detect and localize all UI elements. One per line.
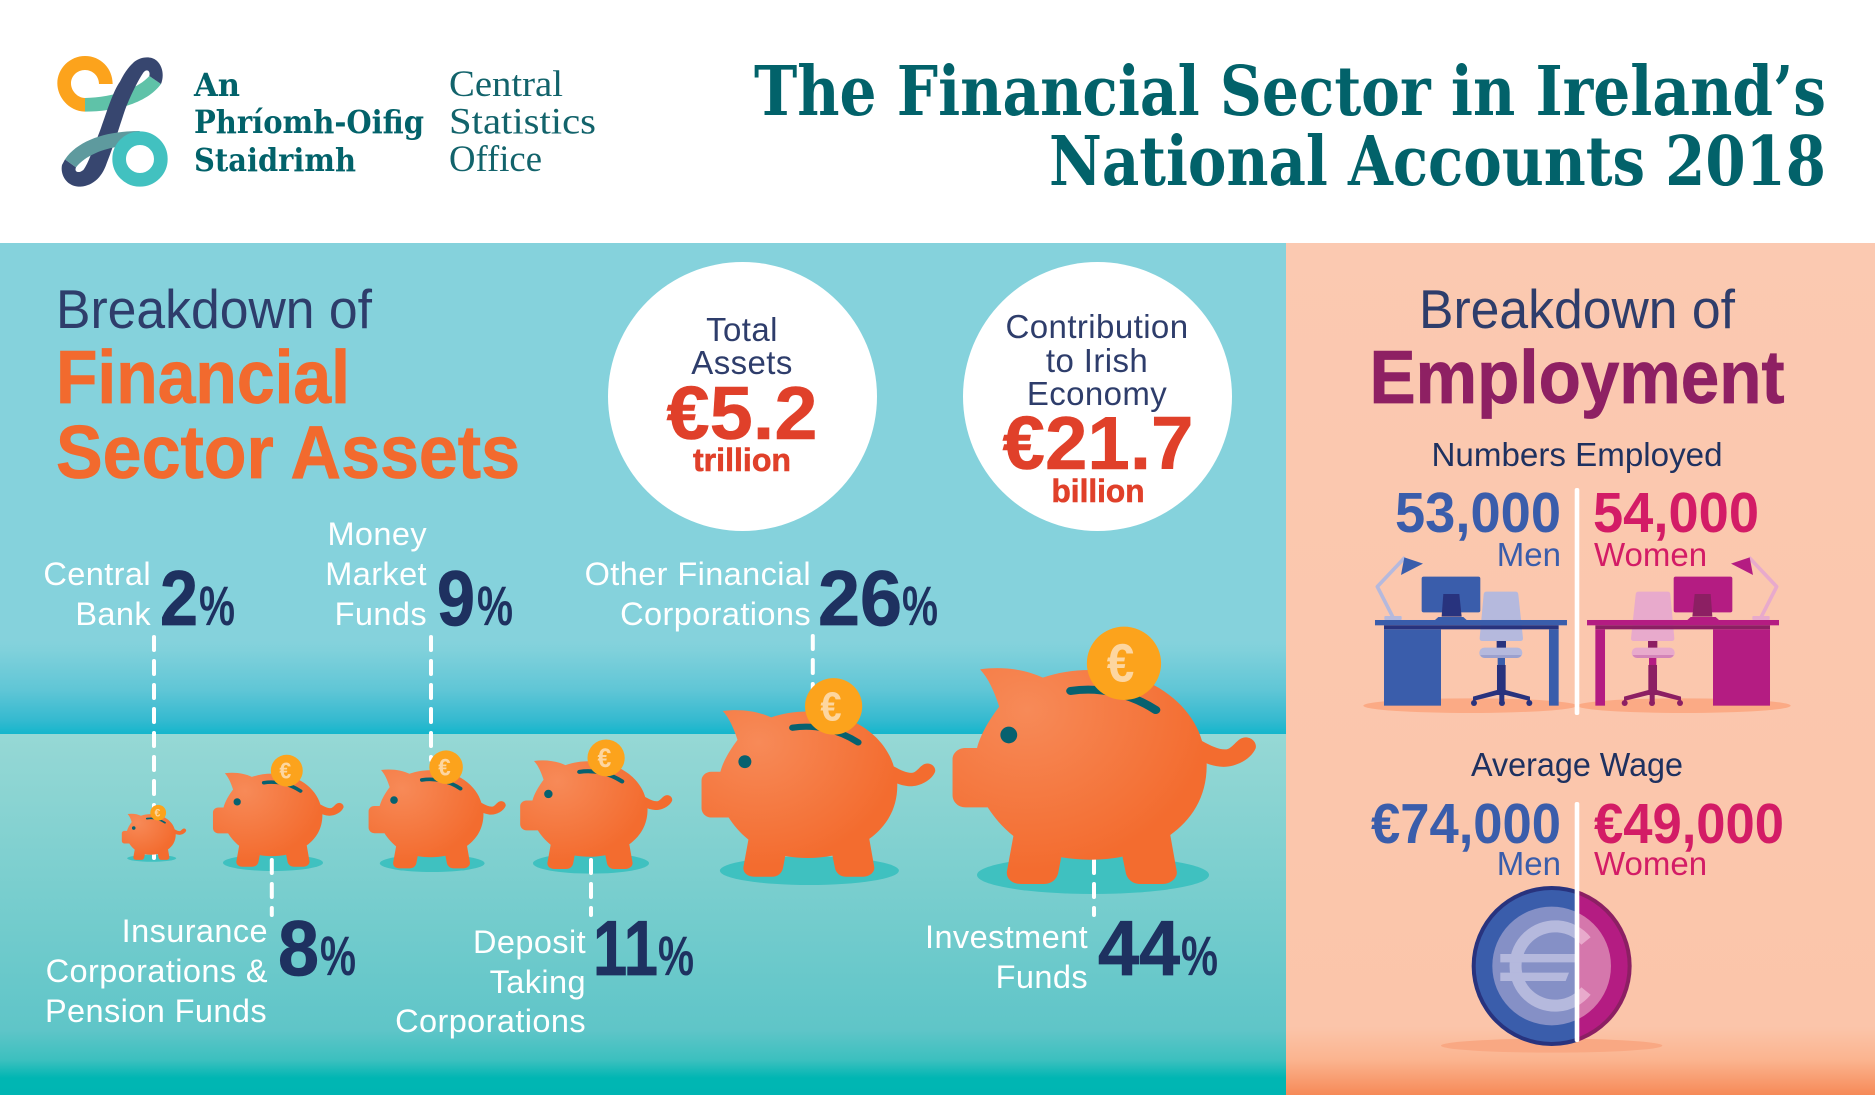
label: investment funds 44%: Funds	[996, 959, 1088, 995]
label: deposit taking corporations 11%: Corporations	[395, 1003, 586, 1039]
label: money market funds 9%: %	[477, 574, 513, 637]
dashed leader lines	[154, 636, 1094, 915]
text: average wage: Men	[1497, 845, 1561, 882]
label: insurance corporations and pension funds 8%: %	[320, 924, 356, 987]
divider lines	[1575, 488, 1579, 1042]
text: average wage: €74,000	[1371, 792, 1561, 856]
text: average wage: Average Wage	[1471, 746, 1683, 783]
label: central bank 2%: Central	[43, 556, 151, 592]
icon: piggy bank deposit taking	[520, 739, 672, 869]
heading: breakdown of employment: Breakdown of	[1419, 278, 1736, 340]
text: English office name: Statistics	[449, 102, 596, 142]
icon: women's desk	[1577, 557, 1791, 713]
icon: piggy bank other financial	[702, 678, 935, 877]
label: investment funds 44%	[925, 904, 1218, 995]
text: numbers employed	[1395, 436, 1759, 573]
label: other financial corporations 26%	[585, 554, 938, 642]
label: deposit taking corporations 11%: Taking	[490, 964, 586, 1000]
text: numbers employed: Numbers Employed	[1432, 436, 1722, 473]
label: insurance corporations and pension funds 8%: Insurance	[122, 913, 268, 949]
icon: piggy bank insurance	[213, 755, 344, 867]
label: central bank 2%: 2	[160, 554, 198, 642]
icon: men's desk	[1363, 557, 1577, 713]
text: Irish office name: An	[193, 66, 240, 104]
label: investment funds 44%: 44	[1098, 904, 1180, 992]
callout: contribution to Irish economy: €21.7	[1002, 401, 1194, 485]
icon: piggy bank central bank: €	[155, 806, 161, 819]
label: money market funds 9%	[325, 516, 513, 642]
icon: piggy bank money market: €	[438, 753, 451, 781]
label: money market funds 9%: Money	[327, 516, 427, 552]
callout: contribution to Irish economy: Economy	[1027, 375, 1167, 412]
icon: logo knot mark	[57, 56, 163, 187]
label: investment funds 44%: Investment	[925, 919, 1088, 955]
text: average wage: €49,000	[1594, 792, 1784, 856]
icon: piggy bank investment funds	[953, 627, 1256, 884]
icon: piggy bank deposit taking: €	[597, 744, 611, 774]
panel: financial sector assets background	[0, 243, 1286, 1095]
icon: piggy bank other financial: €	[820, 684, 842, 730]
text: numbers employed: 54,000	[1593, 481, 1759, 545]
label: insurance corporations and pension funds 8%: Pension Funds	[45, 993, 267, 1029]
callout: total assets: trillion	[693, 442, 791, 478]
callout: total assets: €5.2	[666, 371, 818, 455]
icon: piggy bank money market	[369, 750, 506, 868]
heading: breakdown of employment: Employment	[1370, 335, 1785, 419]
heading: breakdown of financial sector assets	[56, 278, 520, 494]
text: Irish office name: Staidrimh	[194, 141, 356, 179]
text: average wage	[1371, 746, 1784, 882]
label: insurance corporations and pension funds 8%: Corporations &	[46, 953, 268, 989]
text: English office name: Central	[449, 64, 563, 105]
pig shadows	[127, 853, 1209, 894]
text: numbers employed: Women	[1594, 536, 1707, 573]
label: central bank 2%: Bank	[75, 596, 151, 632]
callout: total assets: Assets	[691, 344, 793, 381]
label: deposit taking corporations 11%: %	[658, 924, 694, 987]
label: central bank 2%	[43, 554, 235, 642]
label: money market funds 9%: Market	[325, 556, 427, 592]
text: numbers employed: 53,000	[1395, 481, 1561, 545]
icon: euro coin split by gender	[1441, 886, 1662, 1053]
label: insurance corporations and pension funds 8%	[45, 904, 356, 1029]
label: other financial corporations 26%: Corporations	[620, 596, 811, 632]
label: central bank 2%: %	[199, 574, 235, 637]
text: English office name	[449, 64, 596, 180]
label: other financial corporations 26%: Other Financial	[585, 556, 811, 592]
callout: total assets	[608, 262, 877, 531]
title	[754, 52, 1826, 202]
label: other financial corporations 26%: 26	[818, 554, 902, 642]
label: money market funds 9%: Funds	[335, 596, 427, 632]
callout: contribution to Irish economy: Contribution	[1006, 308, 1188, 345]
icon: piggy bank investment funds: €	[1107, 634, 1134, 694]
heading: breakdown of financial sector assets: Sector Assets	[56, 410, 520, 494]
callout: total assets: Total	[706, 311, 778, 348]
logo: Central Statistics Office	[57, 56, 596, 187]
callout: contribution to Irish economy	[963, 262, 1232, 531]
callout: contribution to Irish economy: billion	[1052, 473, 1144, 509]
label: money market funds 9%: 9	[437, 554, 475, 642]
heading: breakdown of financial sector assets: Breakdown of	[56, 278, 373, 340]
text: Irish office name	[193, 66, 424, 179]
icon: piggy bank insurance: €	[279, 759, 291, 784]
label: investment funds 44%: %	[1181, 924, 1218, 987]
label: insurance corporations and pension funds 8%: 8	[278, 904, 319, 992]
label: deposit taking corporations 11%	[395, 904, 694, 1039]
heading: breakdown of financial sector assets: Financial	[56, 335, 350, 419]
callout: contribution to Irish economy: to Irish	[1046, 342, 1148, 379]
panel: employment background	[1286, 243, 1875, 1095]
text: Irish office name: Phríomh-Oifig	[194, 103, 424, 141]
heading: breakdown of employment	[1370, 278, 1785, 419]
label: deposit taking corporations 11%: 11	[593, 904, 658, 992]
text: numbers employed: Men	[1497, 536, 1561, 573]
text: English office name: Office	[449, 139, 542, 180]
icon: piggy bank central bank	[122, 805, 186, 860]
label: deposit taking corporations 11%: Deposit	[473, 924, 586, 960]
text: average wage: Women	[1594, 845, 1707, 882]
label: other financial corporations 26%: %	[902, 574, 938, 637]
